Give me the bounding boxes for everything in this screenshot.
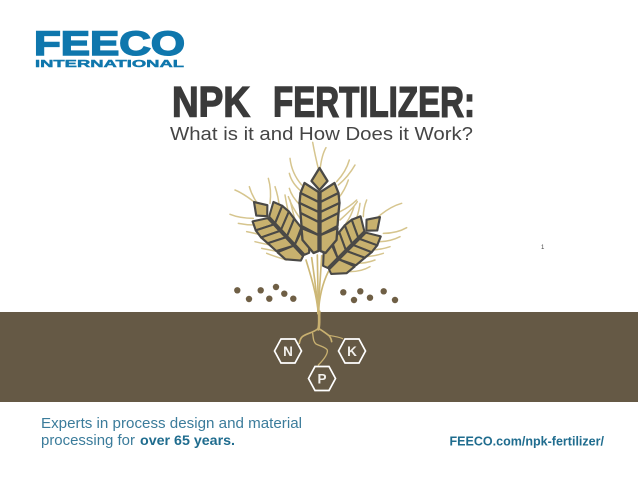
logo: FEECO International: INTERNATIONAL [35, 59, 184, 70]
center ear [300, 168, 340, 253]
left ear [240, 189, 319, 270]
title: FERTILIZER: [273, 78, 475, 126]
website url: FEECO.com/npk-fertilizer/ [450, 434, 604, 448]
logo: FEECO International: FEECO [34, 25, 185, 63]
right ear [314, 204, 393, 283]
hexagon: K [338, 339, 366, 363]
wheat awns [230, 142, 407, 272]
title [172, 78, 475, 126]
icon: wheat plant [230, 142, 407, 313]
title: NPK [172, 78, 250, 126]
tagline: processing for [41, 433, 135, 449]
wheat stems [306, 255, 328, 313]
tagline: over 65 years. [140, 432, 235, 448]
seed dots [234, 284, 398, 303]
hexagon: N [274, 339, 302, 363]
roots [299, 312, 343, 365]
hexagon: K: K [347, 344, 357, 359]
tagline: Experts in process design and material [41, 416, 302, 432]
page number: 1 [541, 245, 545, 251]
soil band [0, 312, 638, 402]
hexagon: P: P [317, 372, 327, 386]
hexagon: P [308, 366, 336, 390]
subtitle: What is it and How Does it Work? [170, 123, 473, 144]
logo: FEECO International [34, 25, 185, 70]
tagline [41, 416, 302, 449]
hexagon: N: N [283, 344, 293, 359]
